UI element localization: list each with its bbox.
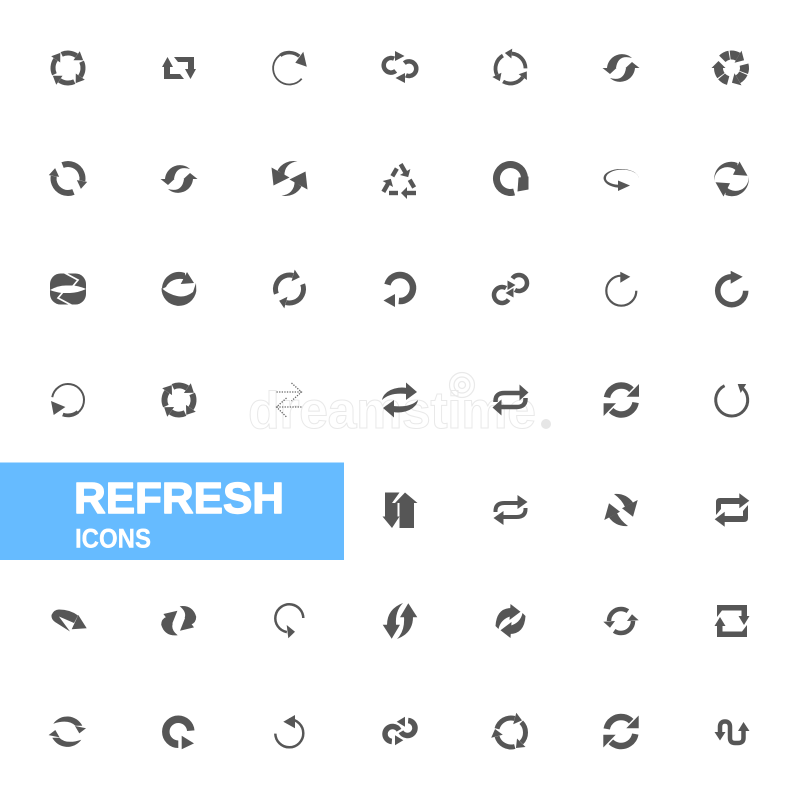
icon: medium ring top arrow — [718, 271, 746, 305]
icon: large tapered arrows — [272, 161, 308, 196]
icon: thick C arrow — [166, 719, 194, 749]
icon: sync square heads — [604, 383, 639, 417]
icon: four-arrow ring bold — [160, 381, 198, 419]
icon: wave arrows — [714, 722, 750, 743]
banner: refresh icons — [0, 462, 344, 560]
icon: four-arrow ring — [48, 48, 88, 88]
icon: tapered ring lower-left arrow — [46, 378, 90, 422]
icon: filled crescent circle — [496, 604, 526, 638]
icon: two thick arcs — [49, 160, 87, 197]
icon: two arcs ring — [272, 270, 307, 308]
icon: tapered side arrows — [49, 716, 86, 747]
icon: thick arc with left head — [384, 272, 416, 307]
icon: flat repeat arrows — [492, 384, 528, 416]
icon: thin undo ring — [275, 715, 303, 747]
icon: two tapered crescents small — [160, 165, 198, 193]
icon: open ring — [709, 377, 754, 423]
icon: thin ring top arrow — [606, 272, 636, 306]
heading: refresh: REFRESH — [74, 474, 284, 523]
icon: diagonal arrows — [604, 494, 638, 526]
icon: thick ring arrow — [493, 161, 528, 196]
icon: two tapered crescents — [602, 54, 640, 82]
icon: fat bent arrow — [51, 610, 87, 632]
icon: up and down block arrows — [382, 492, 418, 528]
icon: recycling blocks — [706, 43, 757, 93]
icon: chain arrows — [491, 272, 530, 306]
watermark: dreamstime — [248, 382, 536, 440]
icon: thin tapered circle arrow — [266, 45, 312, 91]
icon: thick half arrows — [714, 162, 749, 196]
icon: slim sync arrows — [603, 609, 639, 633]
icon: square retweet — [162, 57, 196, 79]
icon: three arc ring — [485, 708, 537, 758]
icon: thin ring bottom arrow — [273, 602, 306, 638]
icon: sync square heads bottom — [603, 715, 639, 748]
icon: recycling triangle — [378, 161, 419, 199]
icon: ellipse orbit arrow — [604, 169, 638, 191]
subheading: icons: ICONS — [75, 524, 151, 554]
icon: square cycle arrows — [714, 605, 750, 637]
icon: vertical swoosh arrows — [383, 603, 417, 639]
icon: linked loop arrows — [381, 51, 419, 83]
icon: interlocked rings — [384, 717, 416, 745]
icon: ribbon ring arrow — [161, 272, 196, 306]
icon: rounded rectangle loop — [715, 493, 749, 527]
icon: leaf arrows — [161, 606, 196, 635]
icon: rounded block with twin arrows — [50, 272, 86, 306]
icon: dotted arrows — [276, 383, 302, 417]
icon: three thin arrows — [485, 46, 536, 93]
icon: swoosh arrows — [382, 382, 418, 418]
icon: thin repeat arrows — [494, 495, 528, 525]
